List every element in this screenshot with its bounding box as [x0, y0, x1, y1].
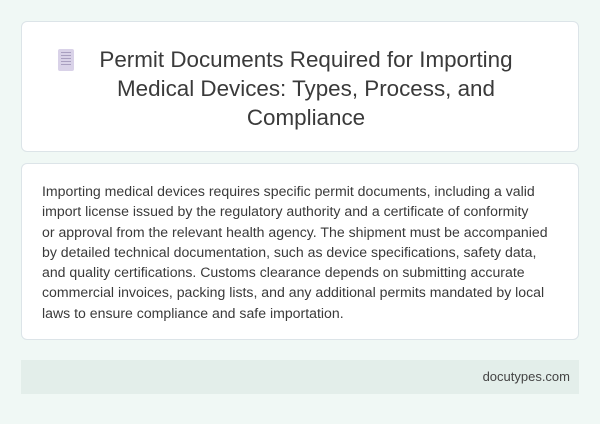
footer text: docutypes.com — [483, 369, 570, 384]
footer bar — [21, 360, 579, 394]
header panel — [21, 21, 579, 152]
description text: import license issued by the regulatory authority and a certificate of conformity — [42, 203, 528, 219]
icon: document — [58, 49, 74, 71]
description text: by detailed technical documentation, such as device specifications, safety data, — [42, 244, 536, 260]
description text: Importing medical devices requires specific permit documents, including a valid — [42, 183, 535, 199]
title: Permit Documents Required for Importing Medical Devices: Types, Process, and Compliance — [99, 47, 513, 130]
description text: laws to ensure compliance and safe importation. — [42, 305, 344, 321]
description text: or approval from the relevant health agency. The shipment must be accompanied — [42, 224, 548, 240]
description text: and quality certifications. Customs clearance depends on submitting accurate — [42, 264, 525, 280]
description text: commercial invoices, packing lists, and any additional permits mandated by local — [42, 284, 544, 300]
description text — [42, 183, 548, 321]
body text panel — [21, 163, 579, 340]
